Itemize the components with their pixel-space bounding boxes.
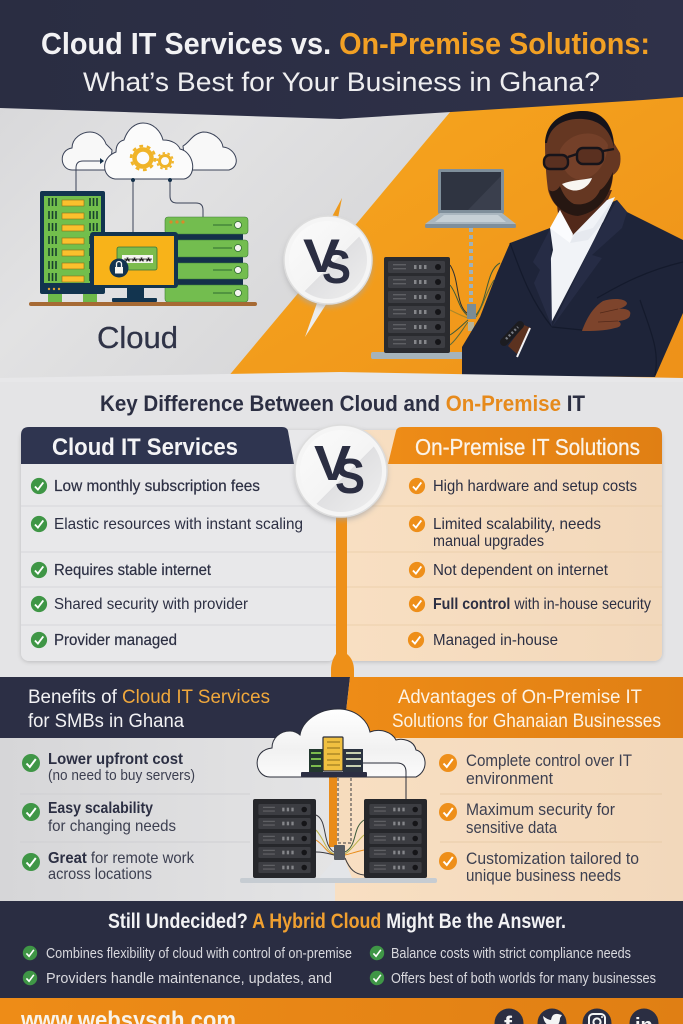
badge: VS coin centre: V	[314, 437, 351, 491]
benefit: remote work: Great for remote work	[48, 850, 195, 867]
panel: benefits and advantages	[0, 677, 683, 901]
advantage: maximum security: sensitive data	[466, 819, 558, 837]
illustration: hybrid cloud and servers	[240, 709, 437, 883]
row: full control: Full control with in-house security	[433, 596, 651, 613]
person: smiling businessman with crossed arms	[462, 111, 683, 377]
advantage: maximum security	[439, 801, 615, 837]
advantage: customization: Customization tailored to	[466, 850, 639, 868]
icon: right server rack	[364, 799, 427, 878]
row: high hardware costs: High hardware and setup costs	[433, 478, 637, 495]
panel: hybrid cloud callout	[0, 901, 683, 998]
advantage: complete control: Complete control over IT	[466, 752, 632, 770]
point: balance costs: Balance costs with strict compliance needs	[391, 945, 631, 962]
suit jacket	[462, 200, 683, 377]
icon: left server rack	[253, 799, 316, 878]
shelf	[29, 302, 257, 306]
row: shared security: Shared security with provider	[54, 596, 249, 613]
panel: hero comparison	[0, 90, 683, 382]
badge: VS coin centre	[295, 425, 387, 520]
panel header	[21, 427, 294, 464]
icon: clouds with gears	[62, 123, 236, 232]
icon: laptop	[425, 169, 516, 302]
panel: on-premise IT solutions comparison	[347, 427, 662, 661]
row: low monthly subscription fees: Low monthly subscription fees	[54, 478, 260, 495]
heading: advantages of on-premise	[343, 677, 683, 738]
row: requires stable internet: Requires stable internet	[54, 562, 212, 579]
icon: linkedin	[630, 1008, 658, 1024]
advantage: complete control: environment	[466, 770, 553, 788]
panel header: Cloud IT Services	[52, 434, 238, 461]
benefit: lower upfront cost: (no need to buy servers)	[48, 767, 195, 784]
title line 2: What’s Best for Your Business in Ghana?	[83, 67, 600, 97]
panel header: On-Premise IT Solutions	[415, 434, 640, 460]
icon: green server stack	[165, 217, 248, 302]
icon: twitter	[538, 1008, 566, 1024]
benefit: easy scalability	[22, 800, 176, 835]
head and face	[544, 111, 621, 216]
heading: benefits of cloud	[0, 677, 350, 738]
heading: key difference: Key Difference Between Cloud and On-Premise IT	[100, 391, 586, 416]
benefit: easy scalability: Easy scalability	[48, 800, 153, 817]
row: managed in-house: Managed in-house	[433, 632, 558, 649]
panel header	[388, 427, 662, 464]
illustration: cloud infrastructure	[29, 123, 257, 306]
heading: hybrid cloud: Still Undecided? A Hybrid Cloud Might Be the Answer.	[108, 910, 566, 933]
badge: VS coin: V	[303, 229, 341, 282]
row: provider managed: Provider managed	[54, 632, 177, 649]
lapels	[533, 229, 552, 327]
badge: VS coin: S	[322, 240, 351, 293]
panel: cloud IT services comparison	[21, 427, 336, 661]
advantage: maximum security: Maximum security for	[466, 801, 615, 819]
heading: benefits of cloud: Benefits of Cloud IT Services	[28, 687, 270, 708]
icon: on-premise server rack with cables	[371, 257, 500, 359]
benefit: easy scalability: for changing needs	[48, 818, 176, 835]
icon: green rack server	[40, 191, 105, 302]
title line 1: Cloud IT Services vs. On-Premise Solutions:	[41, 26, 650, 61]
shirt	[550, 197, 615, 323]
row: limited scalability	[409, 516, 601, 550]
advantage: customization	[439, 850, 639, 885]
badge: VS coin	[284, 216, 372, 307]
hand	[582, 299, 630, 331]
point: combines flexibility: Combines flexibility of cloud with control of on-premise	[46, 945, 352, 962]
icon: lightning bolts behind VS	[305, 198, 342, 337]
benefit: remote work	[22, 850, 195, 883]
neck	[556, 190, 612, 240]
badge: VS coin centre: S	[335, 450, 365, 504]
wrist, watch and cuff	[508, 325, 531, 354]
heading: benefits of cloud: for SMBs in Ghana	[28, 711, 184, 732]
heading: advantages of on-premise: Advantages of On-Premise IT	[398, 687, 642, 708]
benefit: remote work: across locations	[48, 866, 152, 883]
heading: advantages of on-premise: Solutions for Ghanaian Businesses	[392, 711, 661, 732]
advantage: complete control	[439, 752, 632, 788]
benefit: lower upfront cost	[22, 751, 195, 784]
label: Cloud: Cloud	[97, 320, 178, 355]
icon: instagram	[582, 1008, 612, 1024]
row: not dependent on internet: Not dependent on internet	[433, 562, 609, 579]
advantage: customization: unique business needs	[466, 867, 621, 885]
panel: footer	[0, 998, 683, 1024]
row: limited scalability: manual upgrades	[433, 533, 544, 550]
icon: cloud with data servers	[257, 709, 425, 799]
row: limited scalability: Limited scalability, needs	[433, 516, 601, 533]
point: providers handle: Providers handle maintenance, updates, and	[46, 970, 332, 987]
benefit: lower upfront cost: Lower upfront cost	[48, 751, 184, 768]
icon: monitor with password lock	[90, 232, 178, 302]
panel: title banner	[0, 0, 683, 119]
icon: facebook	[494, 1008, 524, 1024]
divider: orange connector	[331, 515, 354, 678]
row: elastic resources: Elastic resources with instant scaling	[54, 516, 303, 533]
icon: monitor with password lock: ****	[124, 256, 153, 268]
